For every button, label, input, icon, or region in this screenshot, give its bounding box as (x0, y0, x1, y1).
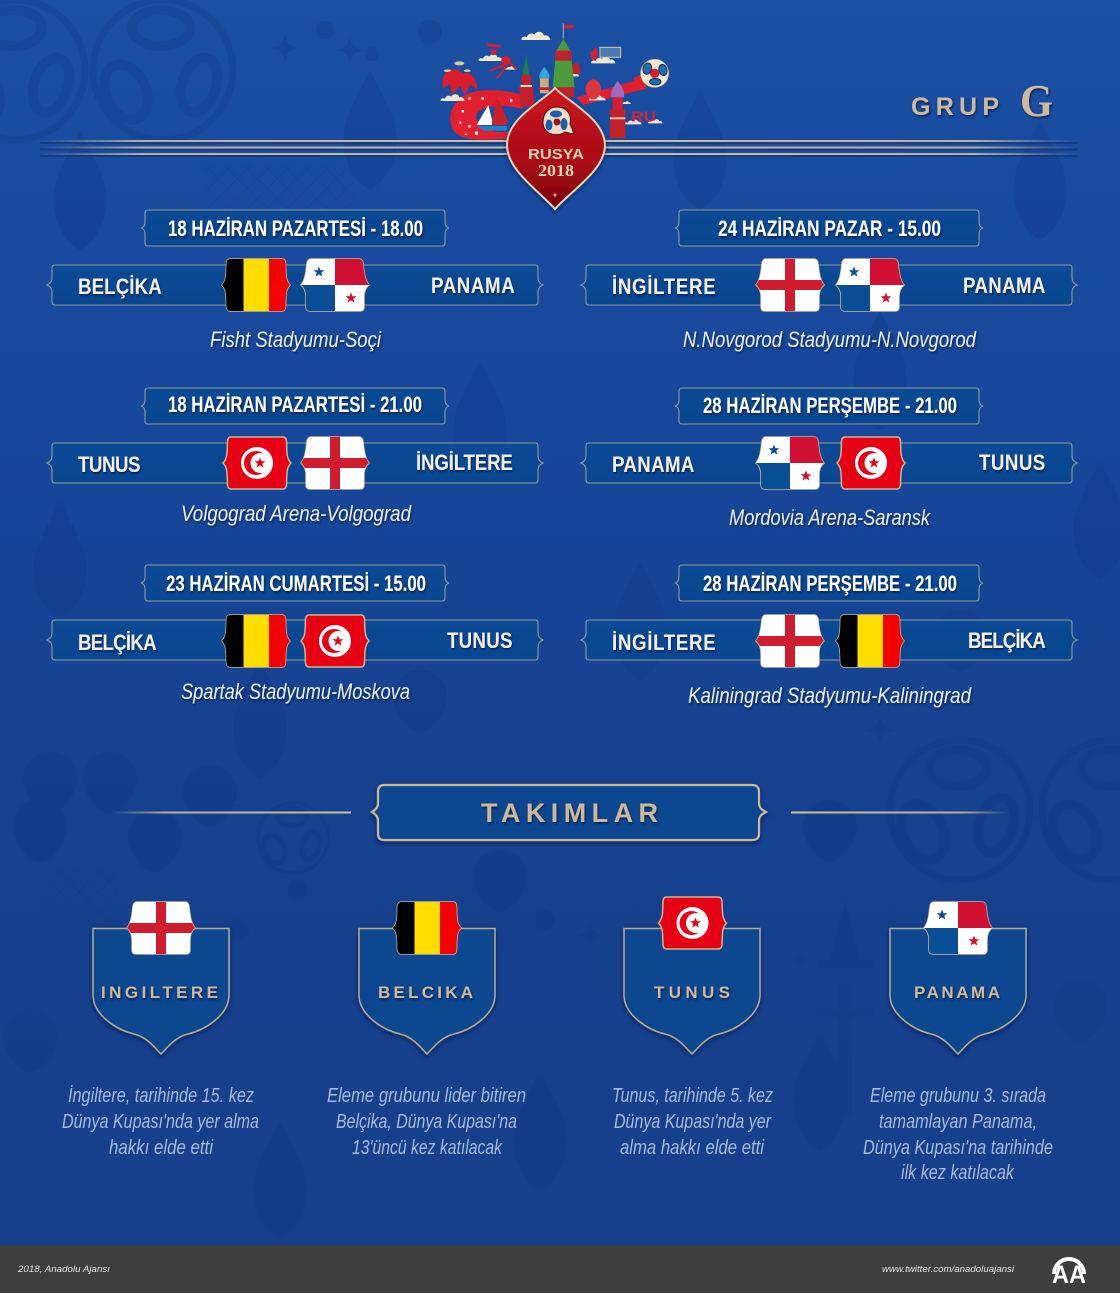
description: tamamlayan Panama, (879, 1111, 1037, 1133)
heading text: TAKIMLAR (481, 798, 658, 828)
team card: Panama (863, 900, 1053, 1184)
team bar (581, 443, 1077, 483)
AA logo: AA (1052, 1261, 1086, 1289)
match: İngiltere - Belçika (581, 565, 1077, 708)
description: Belçika, Dünya Kupası'na (336, 1111, 517, 1133)
flag: Panama (922, 900, 994, 956)
description: 13'üncü kez katılacak (352, 1137, 503, 1159)
team name: BELÇİKA (78, 275, 162, 299)
flag: Panama (834, 257, 906, 313)
heading plate (372, 785, 766, 840)
flag: Tunisia (301, 615, 369, 667)
team label: BELCIKA (378, 983, 473, 1002)
team name: BELÇİKA (78, 631, 157, 655)
red tower (519, 53, 535, 107)
flag: England (299, 435, 371, 491)
flag: Belgium (834, 613, 906, 669)
venue: Spartak Stadyumu-Moskova (181, 679, 410, 704)
match: Tunus - İngiltere (47, 388, 543, 526)
egg (586, 79, 601, 99)
venue: Kaliningrad Stadyumu-Kaliningrad (688, 683, 972, 708)
emblem title: RUSYA (528, 146, 584, 163)
date bar (675, 565, 983, 601)
emblem: Rusya 2018 (507, 88, 605, 209)
team card: Tunus (612, 897, 773, 1159)
date: 18 HAZİRAN PAZARTESİ - 21.00 (168, 392, 422, 417)
date bar (141, 388, 449, 424)
team name: TUNUS (979, 452, 1045, 475)
description: Dünya Kupası'nda yer alma (62, 1111, 259, 1133)
flag: Tunisia (837, 437, 905, 489)
blue dome tower (539, 67, 550, 93)
team name: İNGİLTERE (416, 451, 513, 475)
team bar (581, 620, 1077, 660)
horses (443, 61, 477, 95)
team name: TUNUS (78, 454, 140, 477)
group title: GRUP (911, 93, 999, 121)
football (633, 59, 669, 90)
red ribbon (450, 90, 523, 140)
shield (890, 928, 1026, 1054)
clouds (441, 32, 663, 124)
description: ilk kez katılacak (901, 1162, 1015, 1184)
team name: PANAMA (612, 454, 695, 477)
team label: PANAMA (914, 983, 1000, 1002)
date bar (675, 210, 983, 246)
description: Dünya Kupası'na tarihinde (863, 1137, 1053, 1159)
team name: İNGİLTERE (612, 275, 716, 299)
team bar (47, 265, 543, 305)
match: Belçika - Panama (47, 210, 543, 352)
description: İngiltere, tarihinde 15. kez (68, 1085, 254, 1107)
date: 23 HAZİRAN CUMARTESİ - 15.00 (166, 571, 426, 596)
green tower (553, 23, 575, 97)
shield (624, 928, 760, 1054)
shield (93, 928, 229, 1054)
flag: Panama (754, 435, 826, 491)
team card: Belçika (327, 900, 526, 1159)
description (612, 1085, 773, 1159)
date bar (141, 210, 449, 246)
team bar (581, 265, 1077, 305)
venue: Volgograd Arena-Volgograd (181, 501, 412, 526)
team name: TUNUS (447, 630, 512, 653)
group title (911, 75, 1053, 126)
description (863, 1085, 1053, 1184)
team name: PANAMA (963, 275, 1046, 298)
shield (359, 928, 495, 1054)
team name: PANAMA (431, 275, 515, 298)
description: Dünya Kupası'nda yer (614, 1111, 772, 1133)
ribbon to ball (577, 78, 647, 105)
flag: Belgium (220, 257, 292, 313)
header rules (40, 140, 1078, 157)
description: Eleme grubunu lider bitiren (327, 1085, 526, 1107)
purple dome tower (610, 81, 625, 138)
twitter url: www.twitter.com/anadoluajansi (882, 1264, 1015, 1275)
flag: England (754, 257, 826, 313)
description: hakkı elde etti (109, 1137, 213, 1159)
matryoshka (572, 63, 580, 74)
description (327, 1085, 526, 1159)
team card: İngiltere (62, 900, 259, 1159)
flag: Panama (299, 257, 371, 313)
emblem year: 2018 (538, 161, 574, 180)
team label: TUNUS (654, 983, 730, 1002)
team bar (47, 620, 543, 660)
venue: N.Novgorod Stadyumu-N.Novgorod (683, 327, 977, 352)
date bar (141, 565, 449, 601)
emblem logo (543, 107, 573, 135)
flag: Tunisia (223, 437, 291, 489)
team label: INGILTERE (101, 983, 218, 1002)
venue: Fisht Stadyumu-Soçi (210, 327, 382, 352)
flag: Belgium (391, 900, 463, 956)
description: Tunus, tarihinde 5. kez (612, 1085, 773, 1107)
flag: Tunisia (658, 897, 726, 949)
flag: England (754, 613, 826, 669)
match: Belçika - Tunus (47, 565, 543, 704)
date: 24 HAZİRAN PAZAR - 15.00 (718, 216, 941, 241)
illustration: Russian landmarks (441, 23, 669, 140)
description (62, 1085, 259, 1159)
date: 28 HAZİRAN PERŞEMBE - 21.00 (703, 393, 957, 418)
team name: İNGİLTERE (612, 631, 716, 655)
goal (590, 47, 621, 60)
section heading: Takımlar (112, 785, 1010, 840)
sail scene (477, 95, 507, 131)
description: alma hakkı elde etti (620, 1137, 764, 1159)
footer (0, 1245, 1120, 1293)
date: 18 HAZİRAN PAZARTESİ - 18.00 (168, 216, 423, 241)
credit: 2018, Anadolu Ajansı (17, 1264, 110, 1275)
RU text: RU (631, 109, 656, 125)
description: Eleme grubunu 3. sırada (870, 1085, 1046, 1107)
match: İngiltere - Panama (581, 210, 1077, 352)
date bar (675, 388, 983, 424)
date: 28 HAZİRAN PERŞEMBE - 21.00 (703, 571, 957, 596)
emblem star (552, 192, 558, 198)
group title: G (1020, 75, 1053, 126)
venue: Mordovia Arena-Saransk (729, 505, 931, 530)
satellite (486, 43, 517, 79)
team bar (47, 443, 543, 483)
flag: England (125, 900, 197, 956)
match: Panama - Tunus (581, 388, 1077, 530)
team name: BELÇİKA (968, 629, 1046, 653)
flag: Belgium (220, 613, 292, 669)
